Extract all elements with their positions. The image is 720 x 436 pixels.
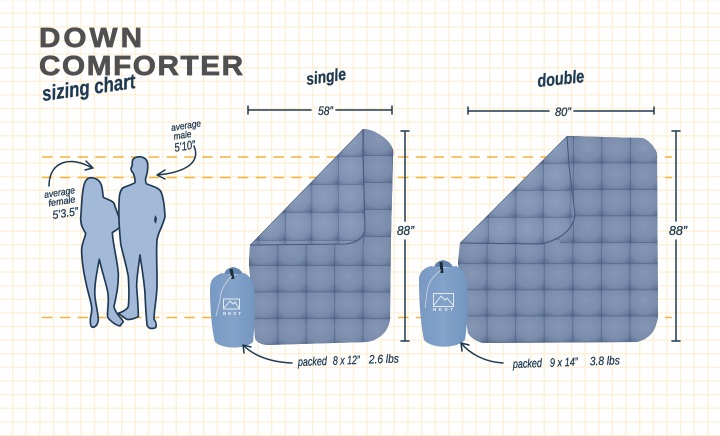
title: COMFORTER: [39, 51, 243, 82]
packed size: single: [297, 351, 399, 369]
title: DOWN: [39, 23, 142, 54]
height guide: floor: [42, 316, 672, 318]
quilt fold: single: [250, 129, 365, 245]
label: average male: male: [173, 129, 192, 143]
height dimension: single 88 inches: 88”: [397, 224, 415, 238]
arrow: single packed: [243, 345, 292, 363]
arrow: female height: [49, 161, 93, 186]
label: average female: [43, 185, 80, 223]
packed size: double: packed: [512, 356, 542, 371]
label: average male: 5’10”: [173, 137, 197, 155]
packed size: double: 3.8 lbs: [590, 353, 620, 368]
label: average female: average: [43, 185, 76, 201]
double quilt: [455, 130, 660, 346]
stuff sack: double: [419, 260, 468, 347]
subtitle: sizing chart: [40, 70, 138, 106]
arrow: male height: [157, 146, 196, 179]
single quilt: [245, 125, 396, 350]
height dimension: single 88 inches: [397, 131, 415, 341]
label: single: single: [305, 65, 347, 89]
label: average female: 5’3.5”: [52, 206, 80, 222]
width dimension: double 80 inches: 80”: [555, 107, 572, 119]
width dimension: double 80 inches: [468, 107, 654, 119]
label: average female: female: [48, 194, 76, 209]
arrow: double packed: [461, 343, 503, 363]
packed size: single: 2.6 lbs: [368, 351, 399, 367]
label: average male: [170, 118, 205, 155]
width dimension: single 58 inches: [248, 106, 392, 118]
stuff sack: single: [210, 267, 255, 348]
quilt fold: double: [460, 136, 575, 244]
height guide: female: [42, 176, 672, 178]
packed size: double: [512, 353, 620, 371]
label: average male: average: [170, 118, 202, 134]
logo: NEST: [223, 311, 241, 316]
logo: NEST: [433, 307, 453, 312]
packed size: single: 8 x 12”: [333, 353, 361, 368]
female silhouette: [81, 178, 123, 327]
width dimension: single 58 inches: 58”: [318, 106, 334, 118]
packed size: double: 9 x 14”: [550, 355, 579, 370]
title: [39, 23, 243, 82]
height dimension: double 88 inches: [669, 131, 688, 341]
height guide: male: [42, 156, 672, 158]
icon: pocket mark: [154, 215, 157, 224]
height dimension: double 88 inches: 88”: [669, 224, 688, 238]
label: double: double: [536, 66, 585, 91]
male silhouette: [118, 157, 165, 329]
packed size: single: packed: [297, 354, 327, 369]
